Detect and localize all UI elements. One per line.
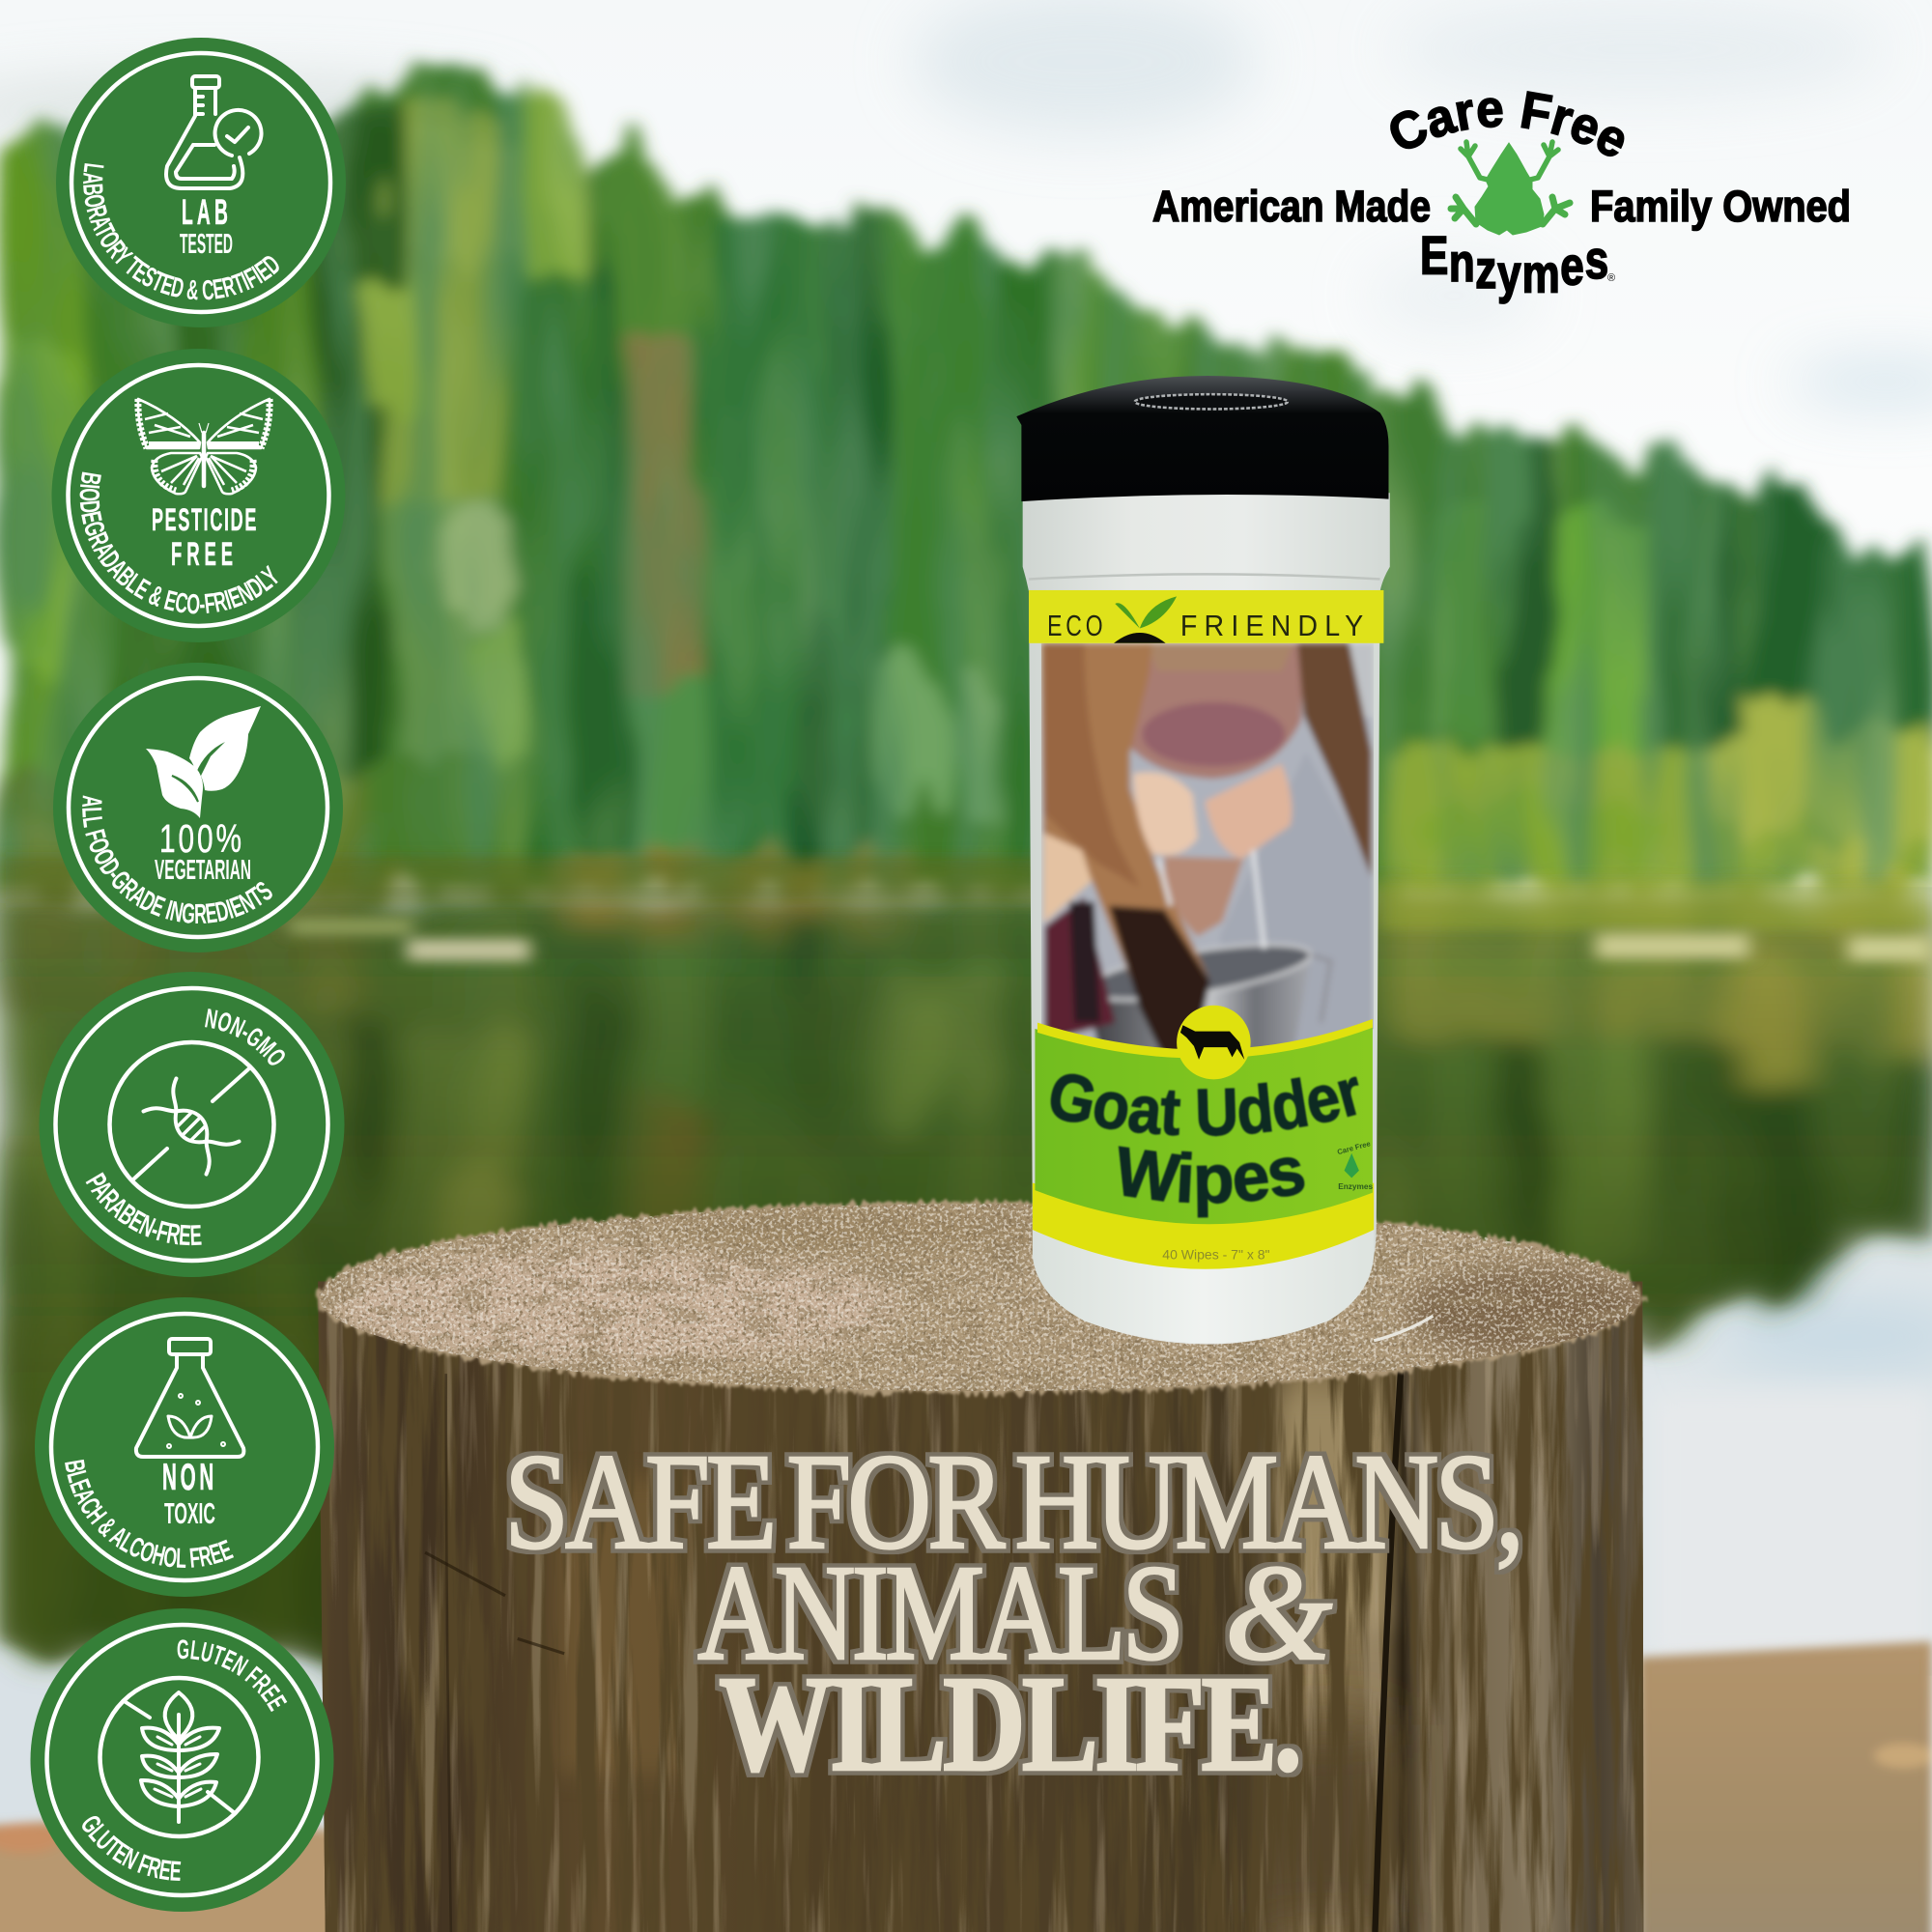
yellow lower band [1033, 1182, 1374, 1269]
badge: non toxic [35, 1297, 334, 1597]
right goat leg [1297, 643, 1372, 877]
cap [1016, 376, 1388, 501]
udder [1130, 643, 1303, 779]
forest reflection in lake [0, 887, 1932, 1786]
badge: non toxic: TOXIC [164, 1496, 215, 1530]
badge: non toxic: BLEACH & ALCOHOL FREE [58, 1458, 237, 1575]
icon: crossed dna [134, 1069, 248, 1179]
badge: lab tested [56, 38, 346, 327]
sandy ground [0, 1641, 1932, 1932]
sky [0, 0, 1932, 1233]
headline: WILDLIFE. [719, 1647, 1298, 1800]
badge: non-gmo: NON-GMO [203, 1003, 292, 1072]
logo: care free enzymes: American Made [1152, 182, 1431, 231]
icon: flask with check [166, 76, 262, 188]
wooden stump side [308, 1269, 1651, 1932]
eco friendly band: ECO [1047, 610, 1106, 642]
badge: non-gmo [39, 972, 344, 1277]
badge: non-gmo: PARABEN-FREE [79, 1169, 203, 1252]
small label logo: Enzymes [1338, 1181, 1373, 1191]
badge: pesticide free: PESTICIDE [152, 502, 258, 537]
wipes count: 40 Wipes - 7" x 8" [1162, 1247, 1270, 1263]
badge: 100% vegetarian [53, 663, 343, 952]
headline: ANIMALS [697, 1536, 1180, 1689]
logo: care free enzymes: ® [1607, 272, 1615, 284]
logo: care free enzymes [1152, 79, 1851, 304]
headline: SAFE FOR HUMANS, [504, 1425, 1520, 1577]
milk bucket [1091, 967, 1306, 1047]
stump top surface [308, 1195, 1651, 1405]
white twig on stump [1374, 1316, 1433, 1341]
headline: & [1225, 1536, 1332, 1689]
left goat leg [1041, 643, 1210, 1060]
goat photo on label [1041, 643, 1374, 1065]
forearm and shirt [1043, 833, 1092, 923]
product name: Goat Udder [1049, 1072, 1360, 1138]
badge: lab tested: LAB [182, 192, 232, 232]
icon: butterfly [138, 399, 270, 494]
small label logo: Care Free [1336, 1139, 1372, 1156]
logo: care free enzymes: Enzymes [1420, 224, 1608, 304]
milking hands [1133, 772, 1198, 855]
badge: 100% vegetarian: 100% [159, 816, 244, 861]
icon: crossed wheat [126, 1692, 235, 1822]
badge: 100% vegetarian: VEGETARIAN [155, 855, 251, 886]
green title band [1035, 1025, 1373, 1224]
goat icon badge [1177, 1006, 1251, 1079]
lake water reflecting sky [0, 887, 1932, 1848]
eco friendly band: FRIENDLY [1180, 610, 1370, 642]
small label logo [1336, 1139, 1373, 1191]
icon: flask with leaves [136, 1339, 243, 1457]
forest hillside [0, 0, 1932, 899]
badge: gluten free: GLUTEN FREE [177, 1634, 293, 1716]
eco friendly band [1029, 590, 1383, 643]
badge: 100% vegetarian: ALL FOOD-GRADE INGREDIENTS [75, 795, 278, 930]
canister base [1033, 1230, 1374, 1343]
badge: gluten free: GLUTEN FREE [74, 1810, 183, 1888]
badge: lab tested: TESTED [180, 229, 233, 260]
product: wipes canister: Wipes [1117, 1146, 1306, 1219]
icon: leaves [146, 706, 261, 818]
canister body [1023, 493, 1390, 1345]
headline [504, 1425, 1520, 1800]
badge: pesticide free: BIODEGRADABLE & ECO-FRIENDLY [73, 469, 286, 620]
icon: frog [1451, 142, 1570, 235]
product: wipes canister [1016, 376, 1429, 1345]
badge: non toxic: NON [162, 1457, 217, 1498]
shore highlights [0, 856, 1932, 961]
badge: pesticide free: FREE [171, 536, 238, 573]
logo: care free enzymes: Care Free [1379, 79, 1637, 170]
badge: lab tested: LABORATORY TESTED & CERTIFIED [83, 163, 279, 299]
logo: care free enzymes: Family Owned [1590, 182, 1851, 231]
badge: pesticide free [52, 349, 346, 642]
badge: gluten free [31, 1608, 334, 1912]
